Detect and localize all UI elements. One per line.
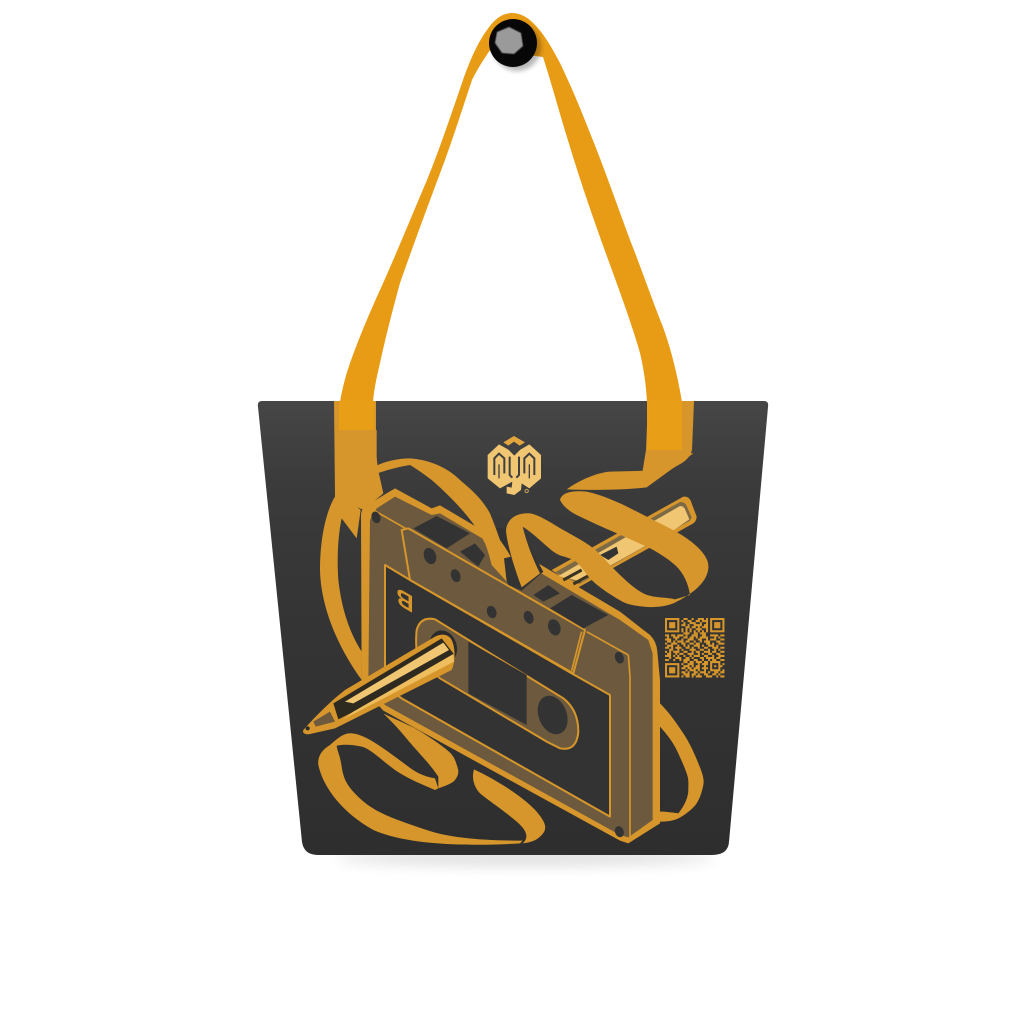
ribbon lower left short piece xyxy=(383,713,458,788)
tote bag body xyxy=(258,401,768,855)
QR code xyxy=(665,619,724,676)
shoulder strap xyxy=(340,13,682,402)
pencil barrel and tip xyxy=(303,635,455,734)
pencil rear end xyxy=(552,497,697,588)
cassette dark window xyxy=(385,565,610,817)
ribbon lower centre xyxy=(473,769,545,843)
side letter B: B xyxy=(396,581,414,617)
pencil socket hole xyxy=(425,626,462,667)
corner screws xyxy=(370,510,625,838)
cassette brown face xyxy=(368,497,653,837)
spool slot window xyxy=(468,642,527,725)
left strap tab xyxy=(339,401,374,452)
printed strap extensions xyxy=(334,401,694,495)
top openings xyxy=(413,516,608,628)
ribbon big left arc xyxy=(320,458,511,680)
hanging peg xyxy=(489,19,541,71)
ribbon lower left loop xyxy=(318,733,523,845)
brand logo xyxy=(488,436,541,495)
cassette spool slot xyxy=(416,619,578,749)
spool slot right hole xyxy=(532,691,573,739)
cassette right edge line xyxy=(628,655,630,837)
ribbon top right connector xyxy=(567,450,693,490)
cassette corner line xyxy=(373,510,628,671)
bag drop shadow xyxy=(335,851,715,865)
cassette outer body xyxy=(361,488,660,843)
ribbon lower right xyxy=(658,703,704,822)
head block holes xyxy=(422,546,563,637)
right strap tab xyxy=(647,401,682,450)
cassette head block xyxy=(402,528,585,673)
ribbon strip left behind cassette xyxy=(335,430,383,510)
artwork: cassette and ribbon, drawn in 3x coordinates xyxy=(303,430,708,845)
ribbon S loop xyxy=(506,491,708,607)
